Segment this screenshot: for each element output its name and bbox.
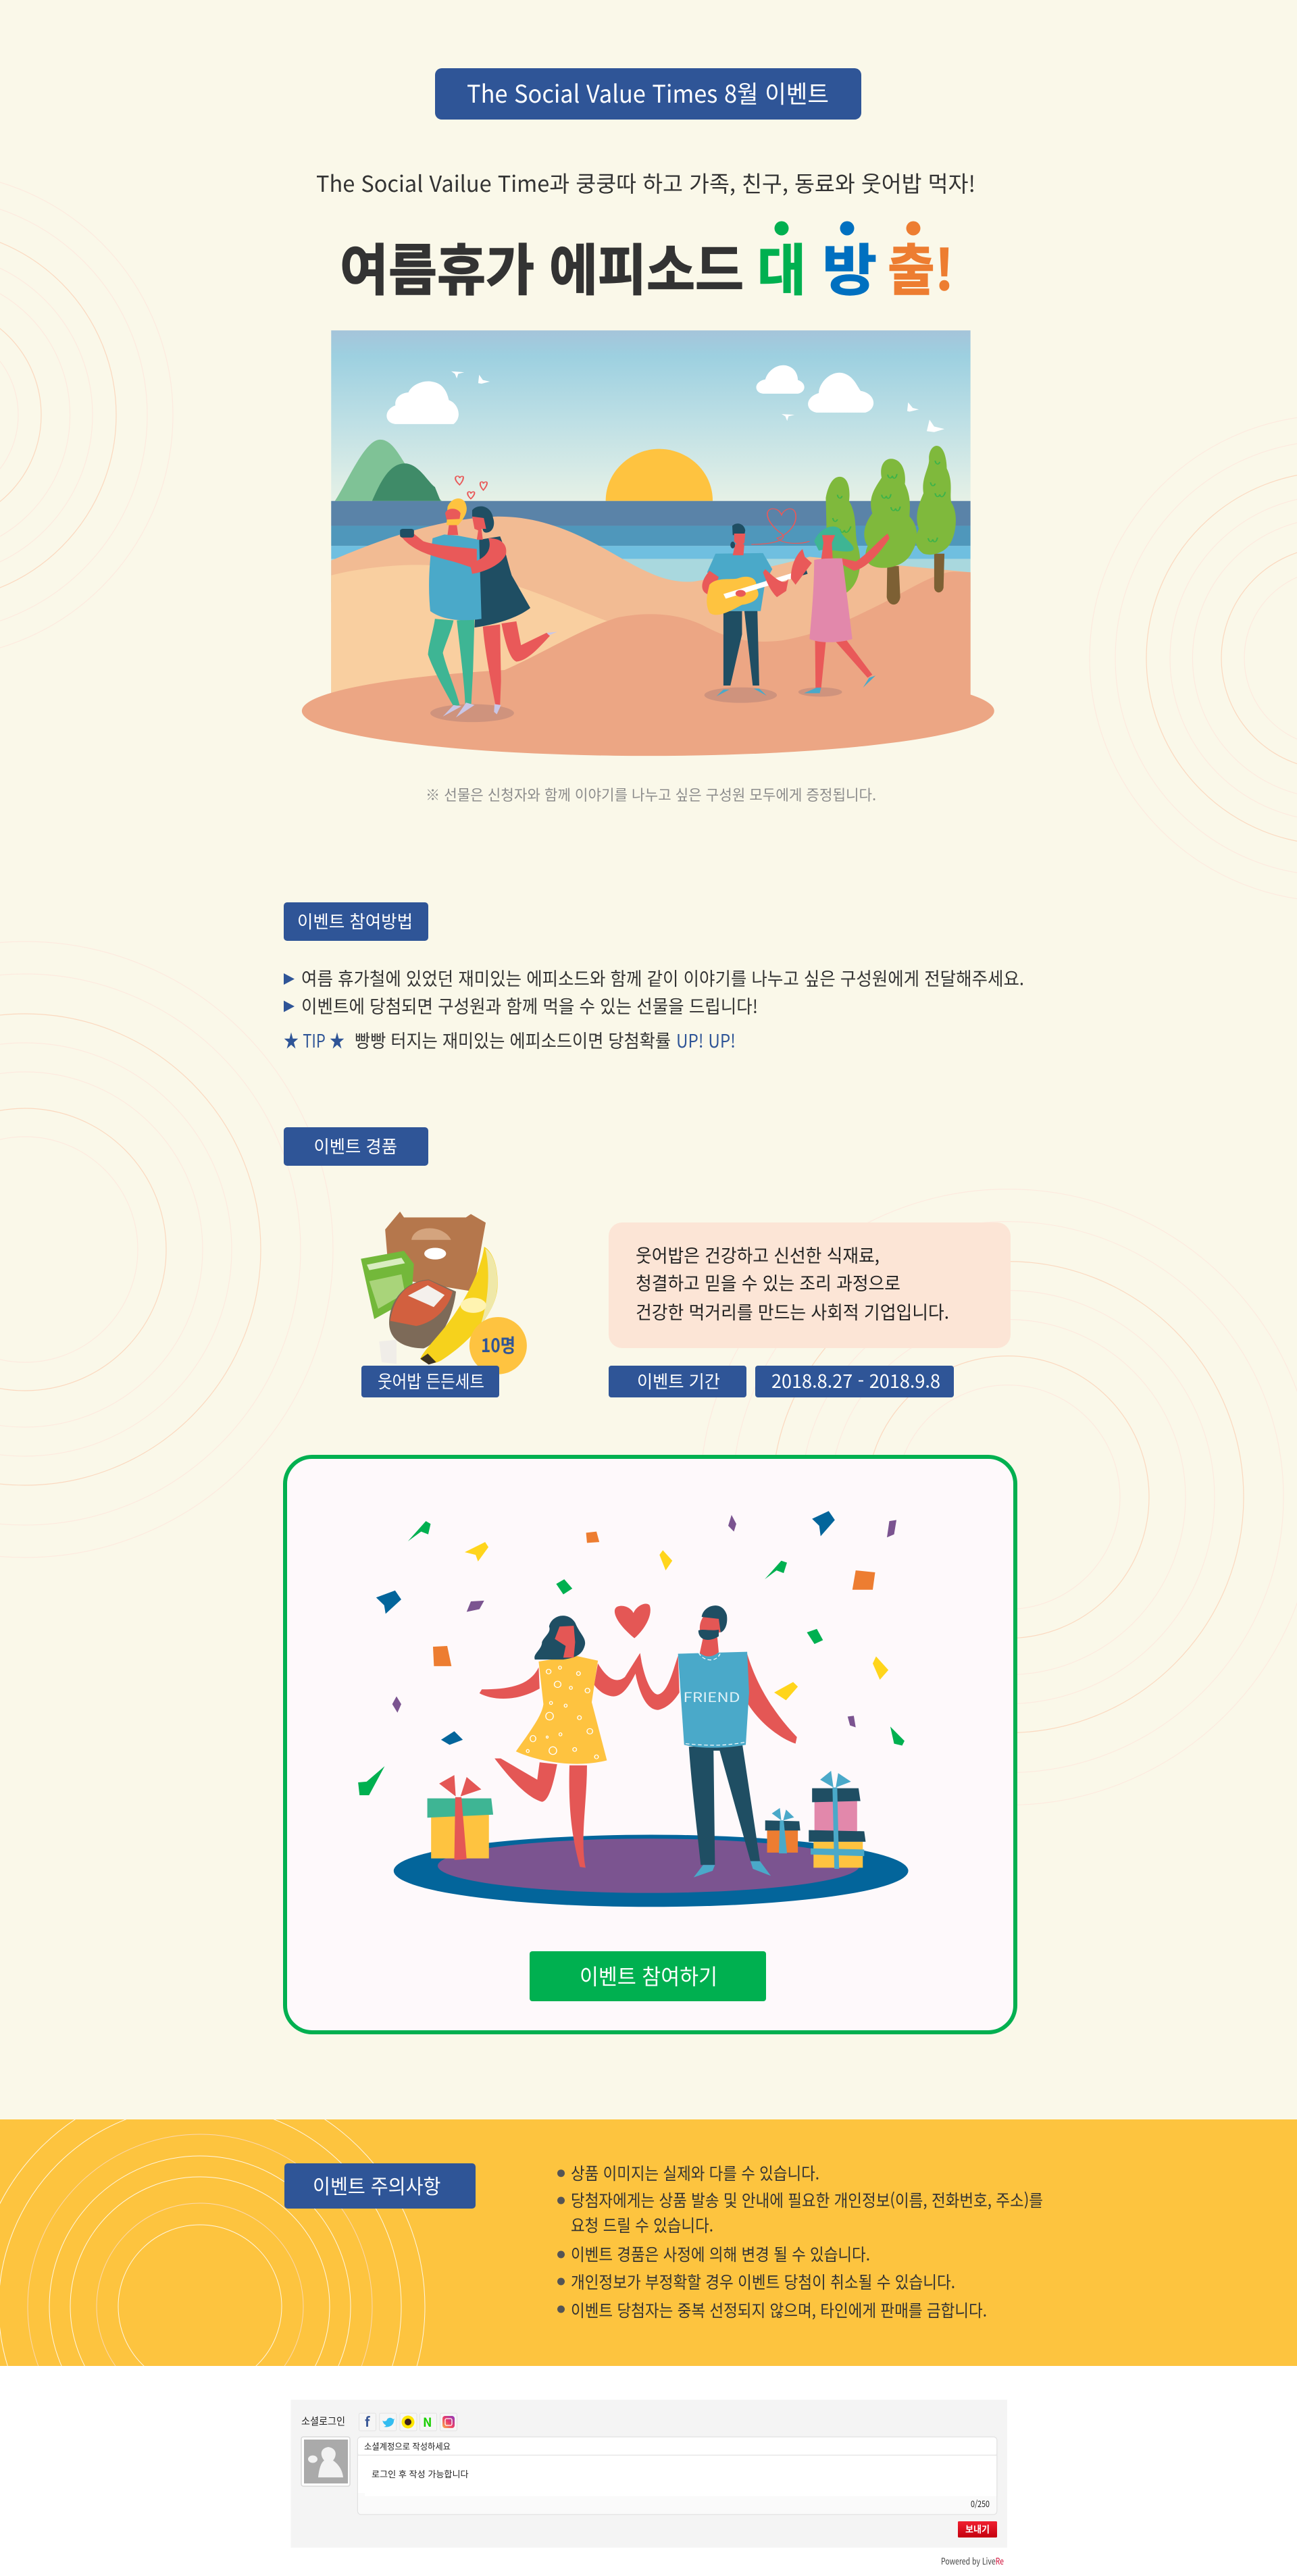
heading: notices: [284, 2163, 476, 2209]
sponsor description: 웃어밥은 건강하고 신선한 식재료,: [636, 1241, 880, 1268]
powered by: Powered by LiveRe: [941, 2554, 1004, 2567]
comment box: 소셜계정으로 작성하세요: [364, 2440, 451, 2452]
couple taking selfie: [400, 476, 557, 722]
badge: 10 people: 10명: [481, 1331, 515, 1358]
avatar placeholder: [301, 2437, 350, 2486]
panel: join card: [285, 1457, 1015, 2032]
caption: ※ 선물은 신청자와 함께 이야기를 나누고 싶은 구성원 모두에게 증정됩니다.: [426, 783, 876, 805]
trees: [825, 446, 956, 604]
button: join event: [530, 1951, 766, 2001]
top badge: The Social Value Times 8월 이벤트: [467, 75, 829, 110]
participation instructions: 여름 휴가철에 있었던 재미있는 에피소드와 함께 같이 이야기를 나누고 싶은 구성원에게 전달해주세요.: [301, 964, 1024, 991]
button: join event: 이벤트 참여하기: [580, 1960, 717, 1991]
participation instructions: 빵빵 터지는 재미있는 에피소드이면 당첨확률: [355, 1027, 671, 1053]
social login label: 소셜로그인: [301, 2414, 345, 2428]
notices list: 당첨자에게는 상품 발송 및 안내에 필요한 개인정보(이름, 전화번호, 주소)를: [571, 2188, 1043, 2212]
event period label: 이벤트 기간: [637, 1368, 720, 1393]
comment box: [357, 2437, 997, 2515]
prize photo: [361, 1212, 527, 1374]
icon: left gift: [428, 1775, 493, 1860]
prize name: [361, 1366, 499, 1397]
top badge: [435, 68, 861, 120]
notices list: 상품 이미지는 실제와 다를 수 있습니다.: [571, 2161, 819, 2185]
heading: prizes: 이벤트 경품: [313, 1133, 397, 1158]
comment box: 0/250: [971, 2497, 990, 2510]
shirt lettering: FRIEND: [683, 1688, 740, 1706]
title: 출!: [888, 226, 954, 306]
notices list: [557, 2161, 1043, 2322]
event period label: [609, 1366, 746, 1397]
panel: comment widget: [290, 2400, 1007, 2548]
heading: how to participate: 이벤트 참여방법: [297, 908, 413, 933]
event period dates: 2018.8.27 - 2018.9.8: [771, 1367, 940, 1393]
notices list: 이벤트 당첨자는 중복 선정되지 않으며, 타인에게 판매를 금합니다.: [571, 2298, 987, 2322]
send button: 보내기: [965, 2523, 990, 2536]
woman in yellow dress: [480, 1616, 642, 1867]
heading: how to participate: [284, 902, 428, 941]
participation instructions: UP! UP!: [676, 1027, 736, 1053]
title: [340, 222, 954, 306]
notices list: 요청 드릴 수 있습니다.: [571, 2213, 713, 2237]
participation instructions: ★ TIP ★: [284, 1027, 345, 1053]
social icons: N: [423, 2413, 432, 2431]
heading: notices: 이벤트 주의사항: [313, 2170, 440, 2200]
notices list: 이벤트 경품은 사정에 의해 변경 될 수 있습니다.: [571, 2242, 870, 2266]
subtitle: The Social Vailue Time과 쿵쿵따 하고 가족, 친구, 동료와 웃어밥 먹자!: [316, 166, 975, 199]
icon: heart: [615, 1603, 651, 1639]
social icons: f: [365, 2411, 371, 2431]
title: 여름휴가 에피소드: [340, 226, 744, 306]
title: 방: [822, 226, 877, 306]
heading: prizes: [284, 1127, 428, 1166]
title: 대: [757, 226, 806, 306]
comment box: 로그인 후 작성 가능합니다: [372, 2467, 469, 2480]
social icons: [359, 2411, 457, 2431]
party illustration: [358, 1511, 909, 1907]
panel: notices: [0, 2119, 1297, 2366]
couple with guitar: [702, 509, 890, 703]
prize name: 웃어밥 든든세트: [378, 1368, 484, 1393]
sponsor description: 청결하고 믿을 수 있는 조리 과정으로: [636, 1269, 900, 1295]
beach illustration: [302, 330, 994, 756]
send button: [958, 2521, 997, 2538]
icon: gift stack: [809, 1771, 865, 1869]
man in FRIEND shirt: [636, 1605, 797, 1878]
sponsor description: 건강한 먹거리를 만드는 사회적 기업입니다.: [636, 1298, 949, 1324]
sponsor description: [609, 1222, 1011, 1348]
notices list: 개인정보가 부정확할 경우 이벤트 당첨이 취소될 수 있습니다.: [571, 2269, 955, 2294]
participation instructions: 이벤트에 당첨되면 구성원과 함께 먹을 수 있는 선물을 드립니다!: [301, 992, 758, 1019]
icon: small gift: [765, 1808, 800, 1853]
participation instructions: [284, 964, 1024, 1053]
confetti: [358, 1511, 905, 1795]
